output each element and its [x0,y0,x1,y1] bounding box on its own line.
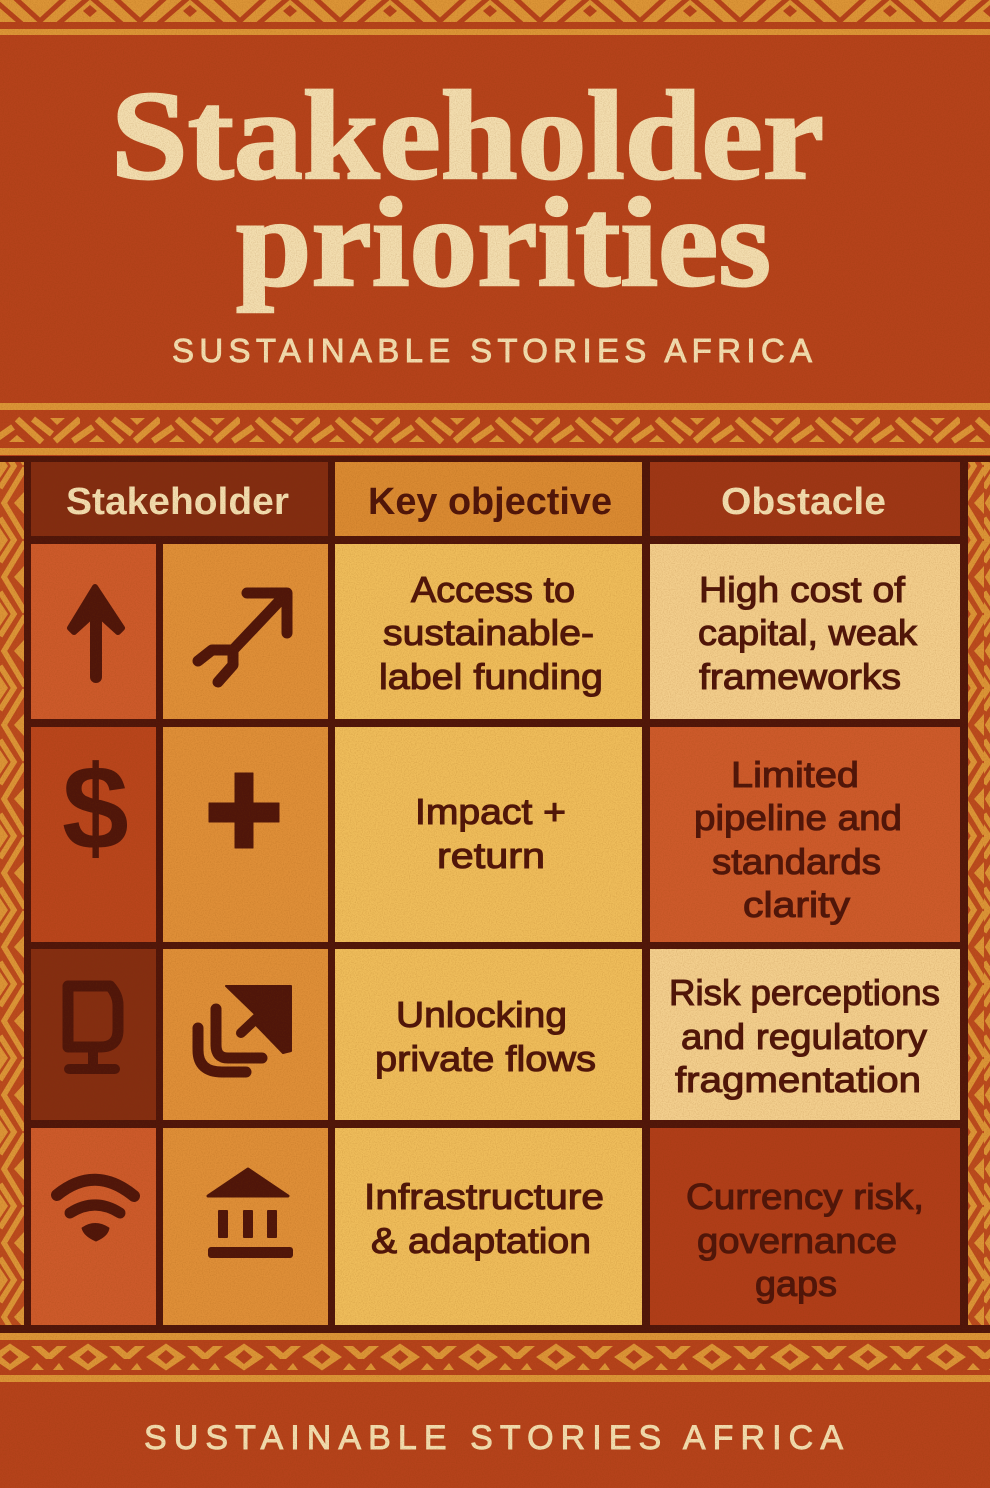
header: stakeholder: Stakeholder [66,481,289,523]
title [111,66,824,313]
row 1 [31,544,960,719]
header: key objective [335,462,642,536]
obstacle 1: High cost of [699,569,906,610]
title: Stakeholder [111,66,824,206]
obstacle 4: gaps [755,1263,837,1304]
objective 1: Access to [411,569,575,610]
obstacle 2: Limited [731,754,859,795]
icon: bank [163,1128,328,1325]
table [0,456,990,1333]
obstacle 2: clarity [743,884,850,925]
title: priorities [236,173,771,313]
objective 1 [335,544,642,719]
bottom decorative band [0,1333,990,1382]
icon: plus [163,727,328,942]
objective 4 [335,1128,642,1325]
icon: layered diagonal arrow [163,949,328,1120]
row 2 [31,727,960,942]
header: key objective: Key objective [368,481,612,523]
obstacle 3: and regulatory [681,1016,927,1057]
footer text: SUSTAINABLE STORIES AFRICA [144,1419,843,1457]
objective 3 [335,949,642,1120]
obstacle 2: standards [712,841,881,882]
obstacle 1 [650,544,960,719]
icon: wifi [31,1128,156,1325]
row 3 [31,949,960,1120]
objective 2: Impact + [415,791,566,832]
header: stakeholder [31,462,328,536]
obstacle 3 [650,949,960,1120]
right side pattern border [968,462,990,1325]
objective 4: & adaptation [371,1220,591,1261]
obstacle 4: Currency risk, [686,1176,924,1217]
middle decorative band [0,403,990,455]
objective 4: Infrastructure [364,1176,604,1217]
top decorative border [0,0,990,35]
icon: forked arrow [163,544,328,719]
objective 3: private flows [375,1038,596,1079]
obstacle 3: fragmentation [675,1059,921,1100]
obstacle 4 [650,1128,960,1325]
objective 2 [335,727,642,942]
icon: dollar: $ [62,741,129,875]
icon: dollar [31,727,156,942]
obstacle 2: pipeline and [694,797,902,838]
header: obstacle: Obstacle [721,481,886,523]
objective 1: label funding [379,656,603,697]
objective 2: return [437,835,545,876]
row 4 [31,1128,960,1325]
obstacle 4: governance [697,1220,897,1261]
obstacle 1: frameworks [699,656,901,697]
left side pattern border [0,462,24,1325]
obstacle 1: capital, weak [698,612,918,653]
obstacle 2 [650,727,960,942]
header: obstacle [650,462,960,536]
obstacle 3: Risk perceptions [669,972,940,1013]
objective 1: sustainable- [383,612,594,653]
icon: monitor [31,949,156,1120]
objective 3: Unlocking [396,994,567,1035]
icon: up arrow [31,544,156,719]
subtitle: SUSTAINABLE STORIES AFRICA [172,332,812,369]
